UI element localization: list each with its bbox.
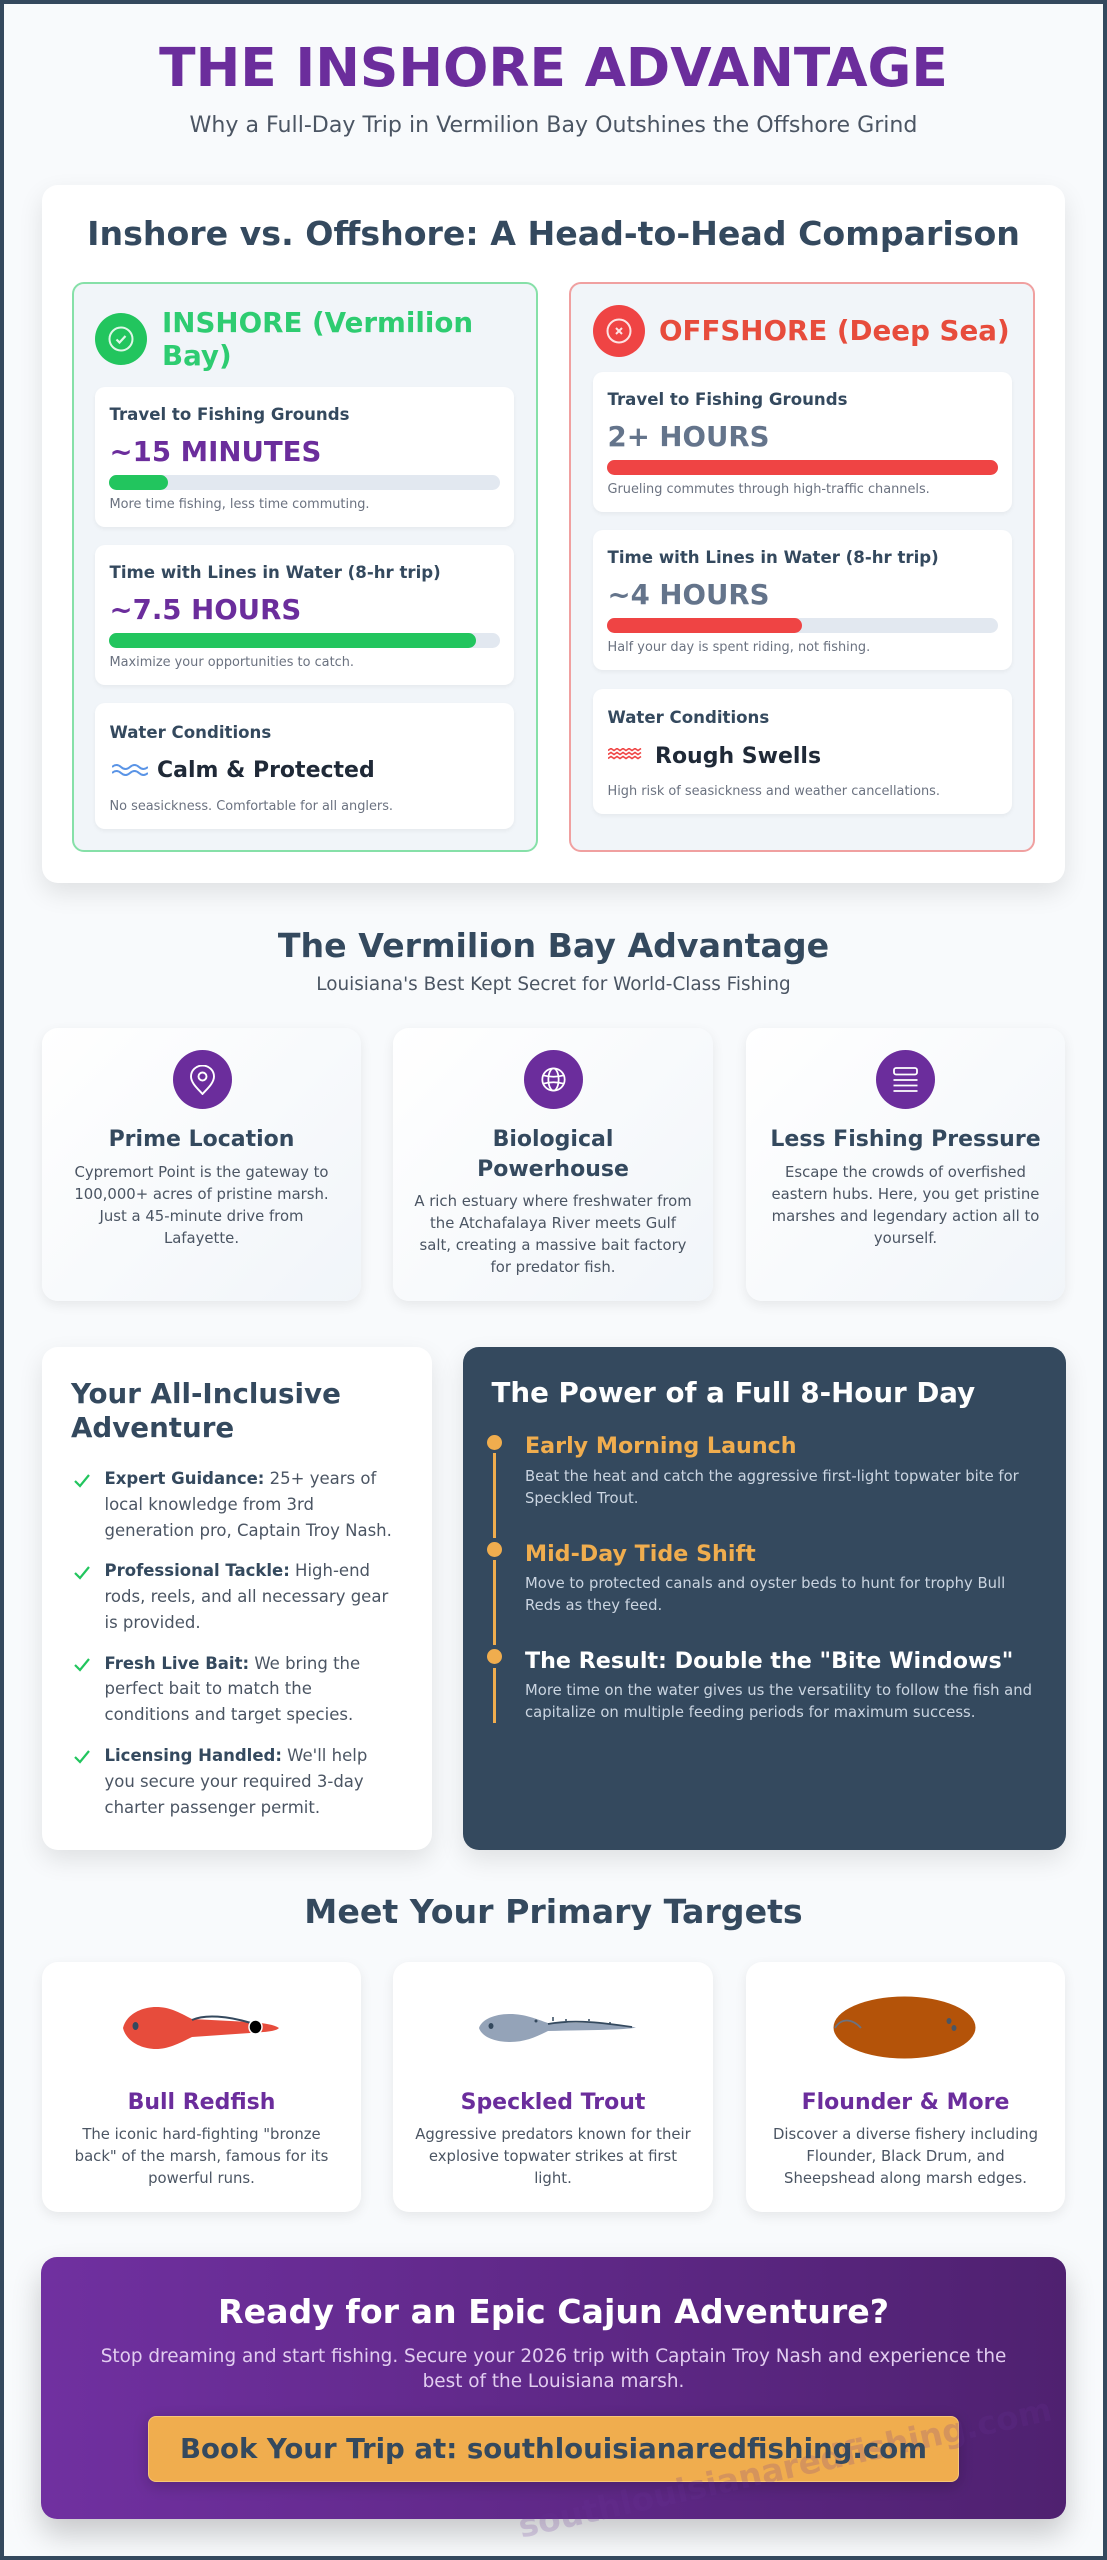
card: less fishing pressure <box>746 1028 1065 1301</box>
heading: all-inclusive: Adventure <box>71 1411 234 1444</box>
checklist: perfect bait to match the <box>104 1679 312 1698</box>
card: less fishing pressure: Escape the crowds of overfished <box>785 1163 1026 1181</box>
header <box>159 36 948 138</box>
title: THE INSHORE ADVANTAGE <box>159 36 948 99</box>
heading: all-inclusive <box>70 1377 341 1444</box>
card: flounder: Flounder & More <box>802 2090 1009 2114</box>
card: flounder: Sheepshead along marsh edges. <box>784 2169 1027 2187</box>
card: biological powerhouse <box>393 1028 713 1301</box>
icon: redfish <box>123 2007 279 2049</box>
card: bull redfish <box>42 1962 361 2212</box>
stat: travel offshore: Grueling commutes through high-traffic channels. <box>608 482 930 496</box>
icon: x circle <box>593 305 645 357</box>
card: biological powerhouse: Powerhouse <box>477 1156 629 1182</box>
card: prime location: 100,000+ acres of pristine marsh. <box>74 1185 329 1203</box>
checklist: generation pro, Captain Troy Nash. <box>104 1521 392 1540</box>
heading: inshore: Bay) <box>162 339 232 372</box>
stat: travel inshore <box>95 387 514 527</box>
card: flounder: Flounder, Black Drum, and <box>806 2147 1005 2165</box>
checklist: Expert Guidance: 25+ years of <box>104 1469 376 1488</box>
heading: offshore: OFFSHORE (Deep Sea) <box>659 314 1010 346</box>
card: speckled trout <box>393 1962 713 2212</box>
checklist <box>74 1469 392 1817</box>
checklist: Fresh Live Bait: We bring the <box>104 1654 360 1672</box>
stat: travel offshore <box>593 372 1012 512</box>
timeline: capitalize on multiple feeding periods for maximum success. <box>525 1704 975 1720</box>
timeline: Move to protected canals and oyster beds to hunt for trophy Bull <box>525 1574 1005 1592</box>
panel: comparison <box>42 185 1065 883</box>
card: speckled trout: light. <box>534 2169 572 2187</box>
heading: 8-hour day: The Power of a Full 8-Hour Day <box>492 1376 975 1409</box>
checklist: you secure your required 3-day <box>104 1772 364 1791</box>
timeline: Beat the heat and catch the aggressive first-light topwater bite for <box>525 1468 1019 1484</box>
heading: inshore: INSHORE (Vermilion <box>162 306 473 338</box>
stat: lines in water inshore: ~7.5 HOURS <box>110 592 301 626</box>
stat: travel inshore: More time fishing, less time commuting. <box>110 496 370 512</box>
stat: travel inshore: Travel to Fishing Grounds <box>110 405 349 424</box>
stat: water inshore <box>95 703 514 829</box>
timeline: Reds as they feed. <box>525 1596 662 1614</box>
stat: water inshore: No seasickness. Comfortable for all anglers. <box>110 798 393 814</box>
card: less fishing pressure: yourself. <box>874 1229 937 1247</box>
icon: calm waves <box>112 764 148 776</box>
stat: lines in water inshore: Maximize your opportunities to catch. <box>110 654 354 670</box>
subtitle: Why a Full-Day Trip in Vermilion Bay Outshines the Offshore Grind <box>190 112 917 138</box>
card: flounder <box>746 1962 1065 2212</box>
button text: Book Your Trip at: southlouisianaredfishing.com <box>180 2432 927 2465</box>
card: less fishing pressure: eastern hubs. Here, you get pristine <box>772 1185 1039 1203</box>
stat: lines in water offshore <box>593 530 1012 670</box>
card: prime location <box>42 1028 361 1301</box>
heading: primary targets: Meet Your Primary Targets <box>304 1892 803 1931</box>
button <box>148 2416 959 2482</box>
card: prime location: Cypremort Point is the gateway to <box>74 1163 328 1181</box>
checklist: local knowledge from 3rd <box>104 1495 314 1514</box>
card: biological powerhouse: the Atchafalaya River meets Gulf <box>430 1214 676 1232</box>
icon: trout <box>479 2014 636 2042</box>
card: prime location: Just a 45-minute drive from <box>99 1207 304 1225</box>
card: prime location: Prime Location <box>109 1126 294 1152</box>
checklist: rods, reels, and all necessary gear <box>104 1587 388 1606</box>
card: speckled trout: explosive topwater strikes at first <box>429 2147 677 2165</box>
text: cta <box>101 2346 1006 2392</box>
heading: comparison: Inshore vs. Offshore: A Head-to-Head Comparison <box>87 214 1020 252</box>
subheading: vermilion bay: Louisiana's Best Kept Secret for World-Class Fishing <box>316 974 791 995</box>
stat: water offshore: Rough Swells <box>655 744 821 768</box>
checklist: Professional Tackle: High-end <box>104 1561 370 1580</box>
timeline: More time on the water gives us the versatility to follow the fish and <box>525 1682 1032 1698</box>
stat: water offshore <box>593 689 1012 814</box>
text: cta: best of the Louisiana marsh. <box>423 2370 684 2392</box>
icon: list <box>876 1050 935 1109</box>
stat: lines in water offshore: Half your day is spent riding, not fishing. <box>608 640 870 654</box>
icon: flounder <box>834 1996 976 2058</box>
card: prime location: Lafayette. <box>164 1229 239 1247</box>
icon: check <box>74 1474 90 1488</box>
card: biological powerhouse: salt, creating a massive bait factory <box>420 1236 686 1254</box>
checklist: charter passenger permit. <box>104 1798 320 1817</box>
stat: lines in water inshore <box>95 545 514 685</box>
icon: check <box>74 1750 90 1764</box>
card: biological powerhouse: for predator fish. <box>491 1258 615 1276</box>
card: bull redfish: powerful runs. <box>148 2169 255 2187</box>
text: cta: Stop dreaming and start fishing. Secure your 2026 trip with Captain Troy Nash and experience the <box>101 2346 1006 2366</box>
heading: vermilion bay advantage: The Vermilion Bay Advantage <box>278 926 829 965</box>
stat: water inshore: Calm & Protected <box>157 758 375 782</box>
stat: lines in water offshore: Time with Lines in Water (8-hr trip) <box>608 548 939 567</box>
checklist: Licensing Handled: We'll help <box>104 1746 367 1765</box>
checklist: is provided. <box>104 1613 201 1632</box>
card: biological powerhouse: Biological <box>493 1126 613 1152</box>
heading: inshore <box>162 306 473 372</box>
icon: check <box>74 1566 90 1580</box>
panel: call to action <box>41 2257 1066 2519</box>
timeline: Speckled Trout. <box>525 1490 638 1506</box>
icon: check <box>74 1658 90 1672</box>
panel: all-inclusive <box>42 1347 432 1850</box>
card: bull redfish: back" of the marsh, famous for its <box>75 2147 328 2165</box>
card: bull redfish: Bull Redfish <box>128 2090 275 2114</box>
step: mid-day tide shift: Mid-Day Tide Shift <box>525 1540 756 1566</box>
card: speckled trout: Aggressive predators known for their <box>415 2125 691 2143</box>
icon: check circle <box>95 313 147 365</box>
timeline <box>487 1433 1032 1723</box>
card: speckled trout: Speckled Trout <box>461 2090 645 2114</box>
icon: rough waves <box>608 748 642 760</box>
icon: map pin <box>172 1050 232 1109</box>
heading: all-inclusive: Your All-Inclusive <box>71 1377 341 1410</box>
card: less fishing pressure: marshes and legendary action all to <box>772 1207 1039 1225</box>
stat: travel offshore: 2+ HOURS <box>608 420 770 452</box>
step: the result: The Result: Double the "Bite Windows" <box>525 1648 1013 1674</box>
stat: water offshore: Water Conditions <box>608 708 769 726</box>
stat: water offshore: High risk of seasickness and weather cancellations. <box>608 784 940 799</box>
card: flounder: Discover a diverse fishery including <box>773 2125 1038 2143</box>
watermark: southlouisianaredfishing.com <box>515 2390 1055 2546</box>
panel: inshore <box>72 282 538 852</box>
stat: lines in water inshore: Time with Lines in Water (8-hr trip) <box>110 563 441 582</box>
checklist: conditions and target species. <box>104 1705 353 1724</box>
panel: offshore <box>569 282 1035 852</box>
card: bull redfish: The iconic hard-fighting "bronze <box>82 2125 321 2143</box>
card: less fishing pressure: Less Fishing Pressure <box>770 1126 1041 1152</box>
card: biological powerhouse: A rich estuary where freshwater from <box>414 1192 692 1210</box>
step: early morning launch: Early Morning Launch <box>525 1433 797 1459</box>
panel: 8-hour day <box>463 1347 1066 1850</box>
heading: cta: Ready for an Epic Cajun Adventure? <box>218 2292 889 2331</box>
stat: lines in water offshore: ~4 HOURS <box>608 578 770 610</box>
icon: globe <box>524 1050 583 1109</box>
stat: travel offshore: Travel to Fishing Grounds <box>608 390 847 409</box>
stat: travel inshore: ~15 MINUTES <box>110 434 321 468</box>
stat: water inshore: Water Conditions <box>110 722 271 742</box>
